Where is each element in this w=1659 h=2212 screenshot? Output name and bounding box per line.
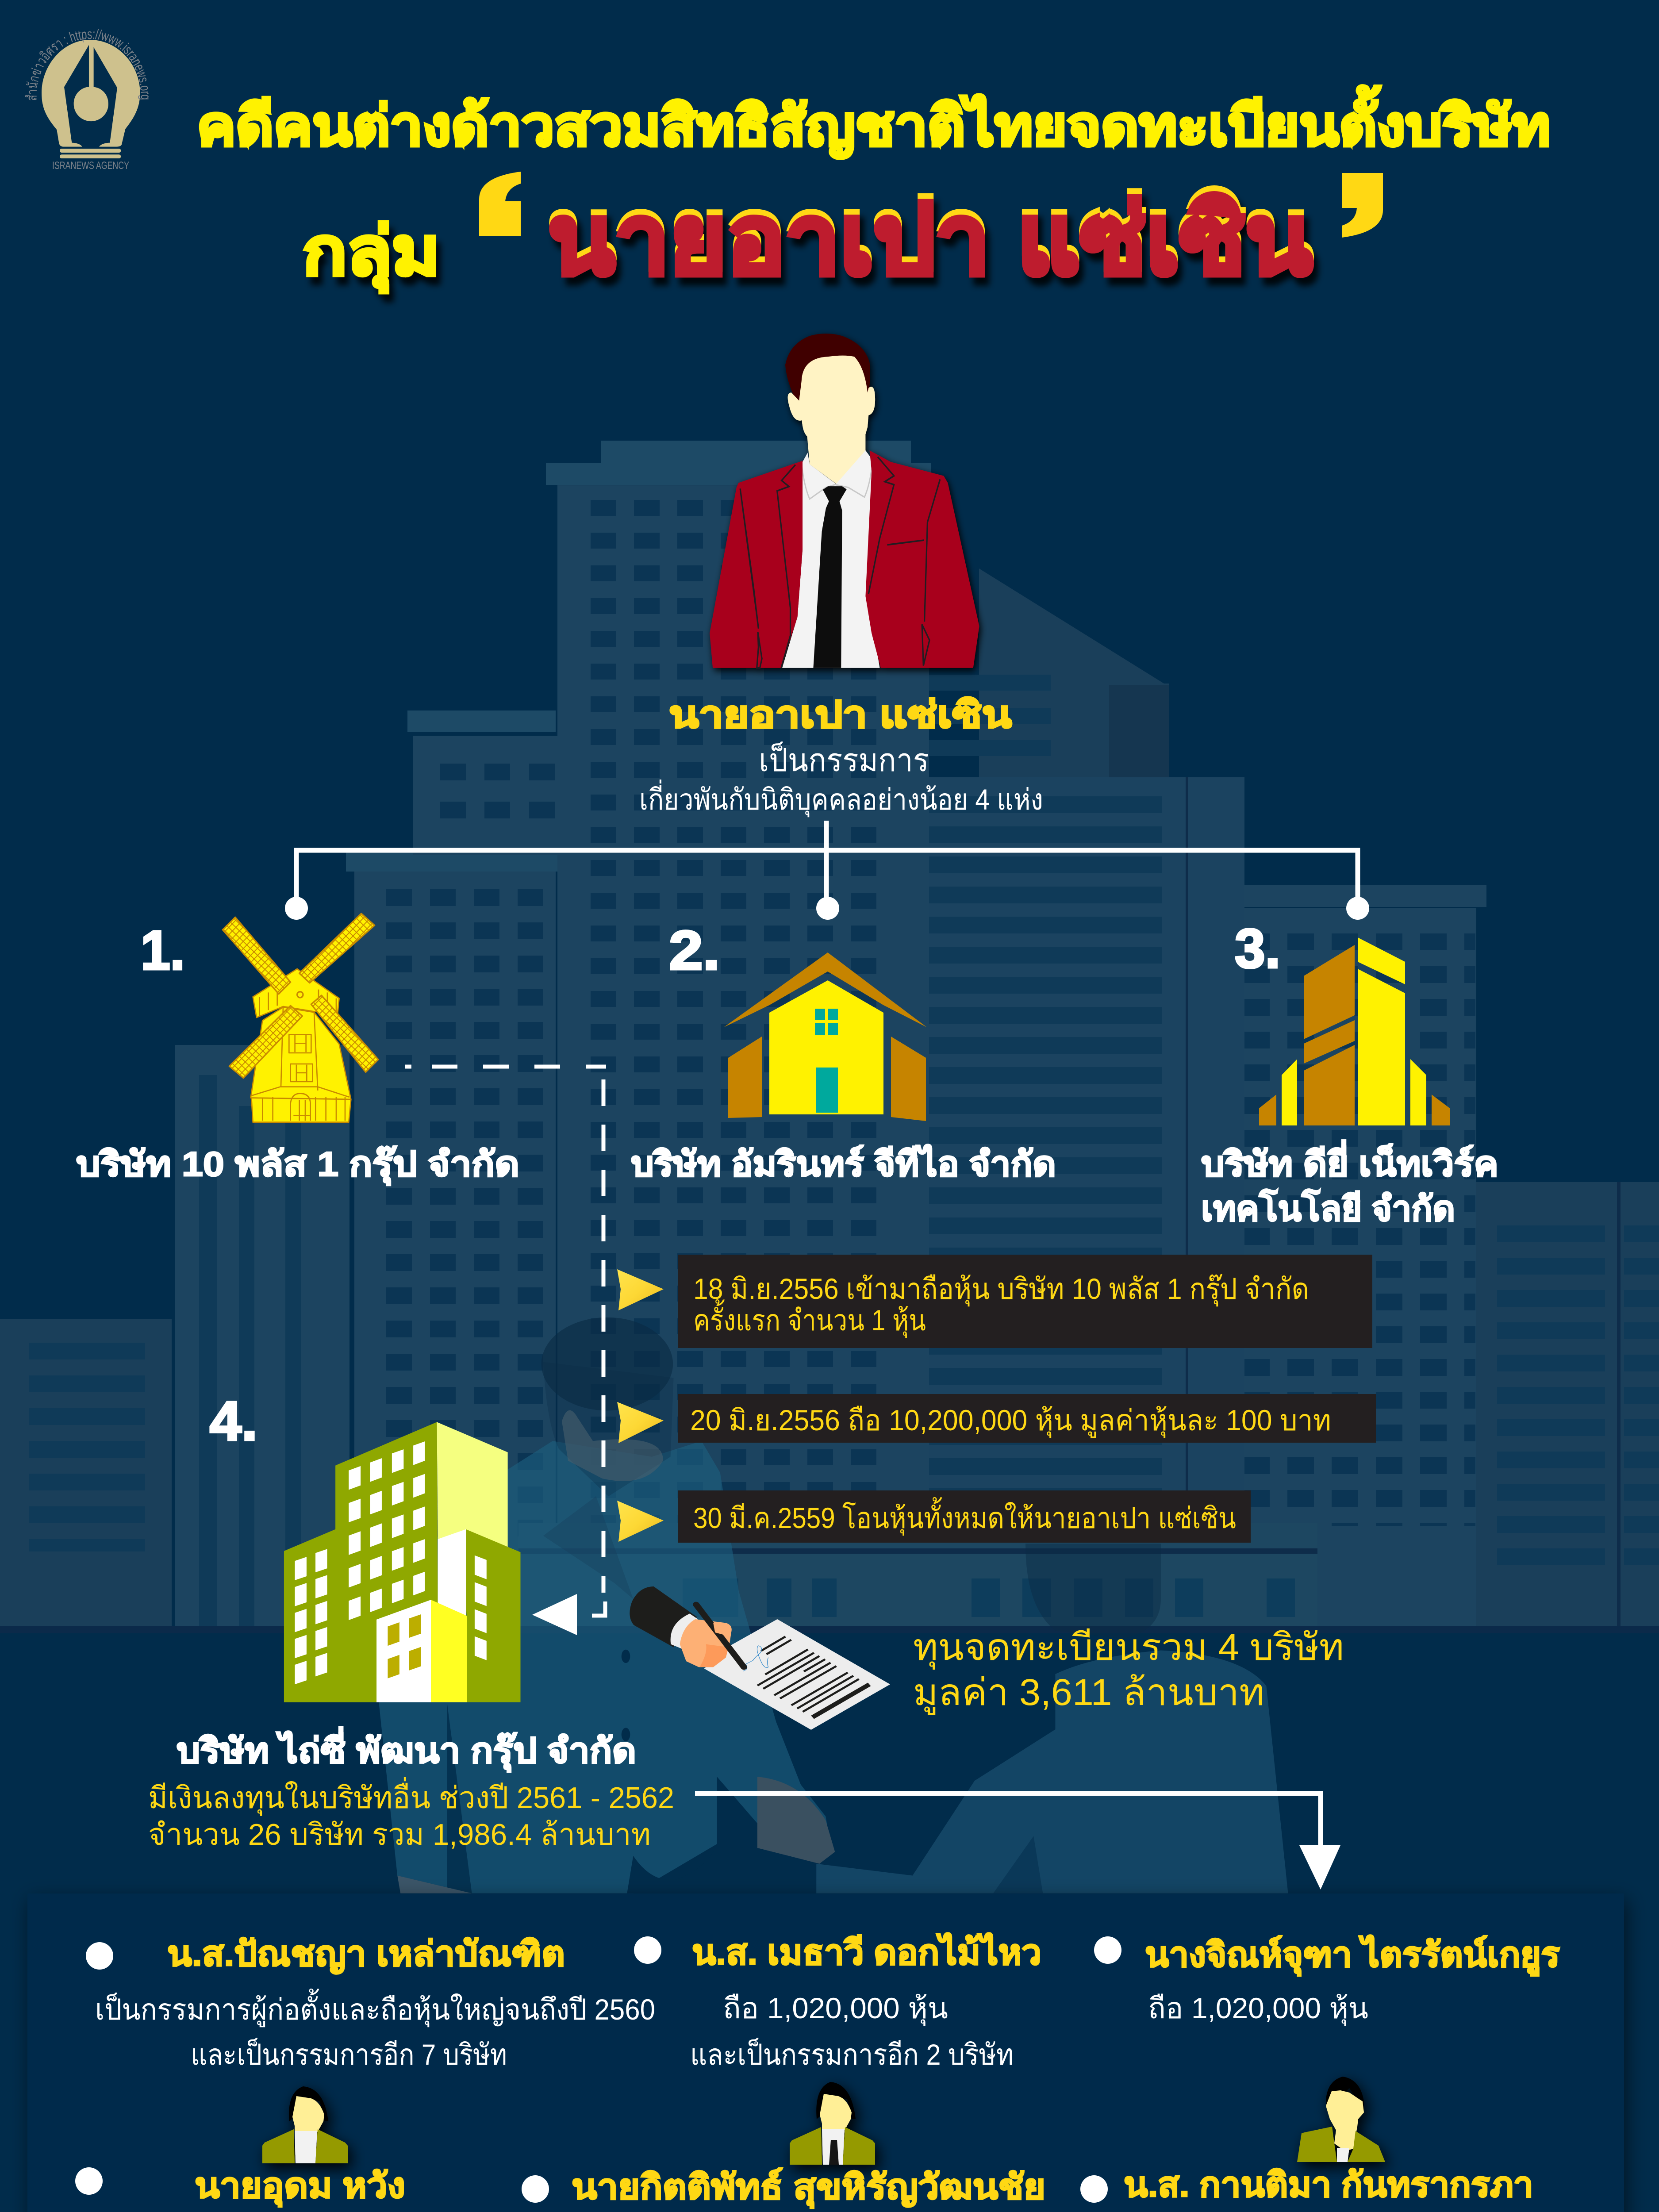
event 2 marker xyxy=(617,1402,664,1443)
number 4: 4. xyxy=(210,1390,257,1452)
closing quotation mark xyxy=(1342,173,1383,238)
portrait: man with tie xyxy=(790,2082,875,2165)
registered capital callout xyxy=(913,1626,1344,1715)
person role: เป็นกรรมการ xyxy=(759,741,929,778)
person 6: bullet xyxy=(1080,2175,1108,2203)
icon: windmill xyxy=(223,914,378,1122)
arrow from company 4 to people panel xyxy=(695,1793,1340,1889)
highlighted name: นายอาเปา แซ่เซิน: นายอาเปา แซ่เซิน xyxy=(548,185,1312,294)
event 1 box: 18 มิ.ย.2556 เข้ามาถือหุ้น บริษัท 10 พลัส 1 กรุ๊ป จำกัด xyxy=(693,1272,1309,1307)
person 2: details: ถือ 1,020,000 หุ้น xyxy=(723,1992,948,2026)
event 3 box xyxy=(678,1490,1251,1543)
person 1: details: และเป็นกรรมการอีก 7 บริษัท xyxy=(191,2037,507,2071)
event 2 box: 20 มิ.ย.2556 ถือ 10,200,000 หุ้น มูลค่าหุ้นละ 100 บาท xyxy=(690,1404,1331,1438)
event 1 box: ครั้งแรก จำนวน 1 หุ้น xyxy=(693,1299,926,1338)
event 1 box xyxy=(678,1255,1372,1348)
background figure: businessman silhouette xyxy=(335,1317,835,1893)
dashed arrow from company 1 to company 4 xyxy=(405,1067,606,1635)
illustration: hand signing document xyxy=(630,1586,890,1730)
person 4: name: นายอุดม หวัง xyxy=(195,2166,405,2207)
logo: Isranews Agency xyxy=(23,26,154,172)
number 2: 2. xyxy=(669,920,720,981)
title line 2: group label: กลุ่ม xyxy=(303,214,440,293)
company 3 label xyxy=(1201,1140,1498,1228)
person 1: bullet xyxy=(86,1942,113,1970)
person 2: details: และเป็นกรรมการอีก 2 บริษัท xyxy=(690,2037,1014,2071)
background city skyline xyxy=(0,441,1659,1633)
icon: house xyxy=(724,952,927,1121)
person relation: เกี่ยวพันกับนิติบุคคลอย่างน้อย 4 แห่ง xyxy=(639,780,1043,818)
person 3: name: นางจิณห์จุฑา ไตรรัตน์เกยูร xyxy=(1145,1935,1560,1976)
person 3: details: ถือ 1,020,000 หุ้น xyxy=(1148,1992,1368,2026)
company 4 investment note: มีเงินลงทุนในบริษัทอื่น ช่วงปี 2561 - 2562 xyxy=(148,1777,674,1816)
event 2 box xyxy=(678,1394,1376,1443)
background figure: second businessman silhouette xyxy=(816,1544,1288,1893)
event 3 marker xyxy=(617,1501,664,1542)
opening quotation mark xyxy=(479,172,521,236)
person 2: name: น.ส. เมธาวี ดอกไม้ไหว xyxy=(692,1932,1041,1972)
person 1: name: น.ส.ปัณชญา เหล่าบัณฑิต xyxy=(167,1934,565,1974)
person 2: details xyxy=(690,1992,1014,2071)
connector tree to companies xyxy=(285,821,1369,920)
person 3: bullet xyxy=(1094,1936,1121,1964)
person 2: bullet xyxy=(634,1936,661,1964)
person 4: bullet xyxy=(75,2167,103,2195)
highlighted name: นายอาเปา แซ่เซิน: นายอาเปา แซ่เซิน xyxy=(548,180,1312,288)
main person illustration: man in red suit xyxy=(710,334,979,668)
icon: office tower xyxy=(1259,937,1450,1125)
company 4 investment note xyxy=(148,1777,674,1851)
company 3 label: เทคโนโลยี จำกัด xyxy=(1201,1188,1455,1228)
logo: Isranews Agency: ISRANEWS AGENCY xyxy=(52,160,129,172)
company 4 investment note: จำนวน 26 บริษัท รวม 1,986.4 ล้านบาท xyxy=(148,1818,651,1851)
person name: นายอาเปา แซ่เซิน xyxy=(669,694,1012,735)
number 1: 1. xyxy=(141,920,185,981)
registered capital callout: มูลค่า 3,611 ล้านบาท xyxy=(913,1671,1264,1715)
person 1: details: เป็นกรรมการผู้ก่อตั้งและถือหุ้นใหญ่จนถึงปี 2560 xyxy=(95,1989,655,2028)
portrait: woman xyxy=(1297,2077,1385,2162)
registered capital callout: ทุนจดทะเบียนรวม 4 บริษัท xyxy=(913,1626,1344,1670)
number 3: 3. xyxy=(1235,918,1280,979)
event 1 marker xyxy=(617,1269,664,1310)
person 6: name: น.ส. กานติมา กันทรากรภา xyxy=(1124,2165,1533,2204)
company 1 label: บริษัท 10 พลัส 1 กรุ๊ป จำกัด xyxy=(76,1144,519,1186)
company 3 label: บริษัท ดียี่ เน็ทเวิร์ค xyxy=(1201,1140,1498,1183)
company 2 label: บริษัท อัมรินทร์ จีทีไอ จำกัด xyxy=(631,1144,1056,1183)
event 3 box: 30 มี.ค.2559 โอนหุ้นทั้งหมดให้นายอาเปา แซ่เซิน xyxy=(693,1497,1236,1536)
title line 1: คดีคนต่างด้าวสวมสิทธิสัญชาติไทยจดทะเบียนตั้งบริษัท xyxy=(197,85,1550,159)
person 5: name: นายกิตติพัทธ์ สุขหิรัญวัฒนชัย xyxy=(572,2167,1045,2208)
person 1: details xyxy=(95,1989,655,2071)
panel: people linked to company 4 xyxy=(27,1893,1624,2212)
icon: green office building xyxy=(284,1422,520,1702)
logo: Isranews Agency: สำนักข่าวอิศรา : https://www.isranews.org xyxy=(23,26,154,101)
portrait: man with open collar xyxy=(262,2086,348,2163)
person 5: bullet xyxy=(522,2175,549,2203)
company 4 label: บริษัท ไถ่ซี่ พัฒนา กรุ๊ป จำกัด xyxy=(177,1726,636,1772)
